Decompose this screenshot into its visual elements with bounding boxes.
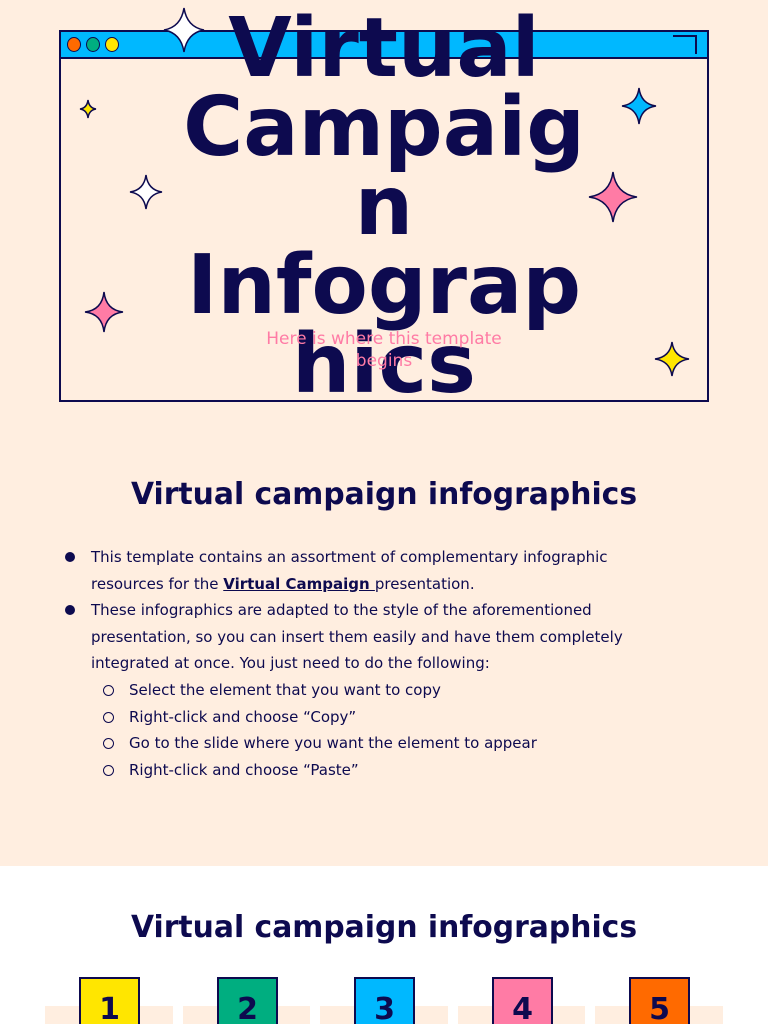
window title bar — [61, 32, 707, 59]
title: n — [355, 159, 413, 254]
title: Virtual — [228, 1, 540, 96]
bullet list: Right-click and choose “Copy” — [129, 708, 356, 726]
subtitle: Here is where this template begins — [266, 329, 502, 371]
window frame — [59, 30, 709, 402]
bullet list: Right-click and choose “Paste” — [129, 761, 359, 779]
bullet list: Select the element that you want to copy — [129, 681, 441, 699]
bullet list: This template contains an assortment of complementary infographic resources for the Virtual Campaign presentation. — [91, 548, 608, 593]
title: Campaig — [183, 80, 585, 175]
bullet list — [65, 548, 623, 779]
title: Infograp — [187, 238, 581, 333]
number tabs — [45, 977, 723, 1024]
heading 2: Virtual campaign infographics — [131, 910, 637, 945]
sparkles — [80, 8, 690, 376]
bullet list: These infographics are adapted to the style of the aforementioned presentation, so you can insert them easily and have them completely integrated at once. You just need to do the following: — [91, 601, 623, 672]
white section — [0, 866, 768, 1024]
heading 1: Virtual campaign infographics — [131, 477, 637, 512]
title: hics — [292, 317, 476, 412]
bullet list: Go to the slide where you want the element to appear — [129, 734, 537, 752]
title — [183, 1, 585, 412]
